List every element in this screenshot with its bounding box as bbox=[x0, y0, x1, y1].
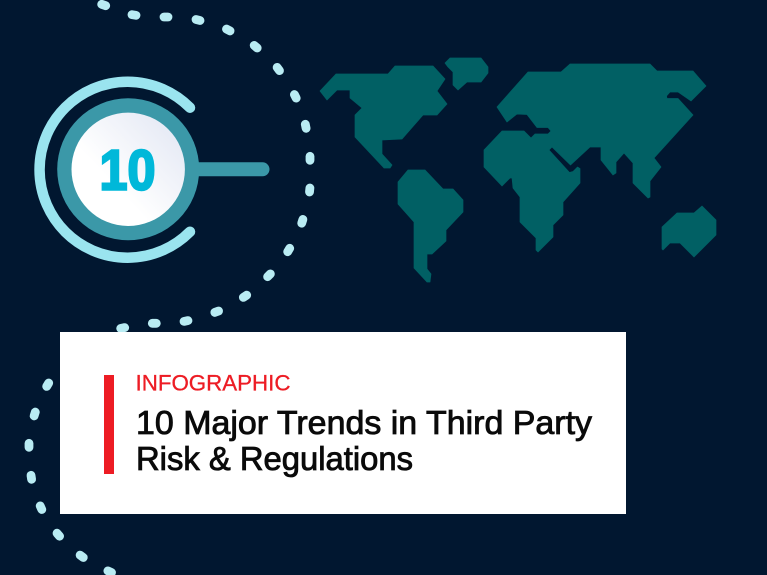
target icon bbox=[40, 82, 263, 258]
dotted curve bbox=[29, 4, 310, 573]
world map bbox=[320, 58, 716, 282]
icon: white disc bbox=[72, 113, 185, 226]
icon: teal ring bbox=[57, 98, 199, 240]
map: South America bbox=[398, 170, 463, 282]
icon: handle bbox=[190, 162, 262, 176]
title text bbox=[136, 404, 593, 477]
title text: 10 Major Trends in Third Party bbox=[136, 404, 593, 441]
panel: title card bbox=[60, 332, 626, 514]
red accent bar bbox=[104, 375, 114, 474]
icon: outer open arc bbox=[40, 82, 190, 258]
map: Australia bbox=[662, 206, 716, 257]
number 10: 10 bbox=[100, 138, 156, 202]
title text: Risk & Regulations bbox=[136, 440, 413, 477]
map: North America bbox=[320, 66, 447, 168]
map: Eurasia and Africa bbox=[484, 64, 706, 252]
label: infographic: INFOGRAPHIC bbox=[136, 370, 290, 396]
map: Greenland bbox=[445, 58, 488, 90]
